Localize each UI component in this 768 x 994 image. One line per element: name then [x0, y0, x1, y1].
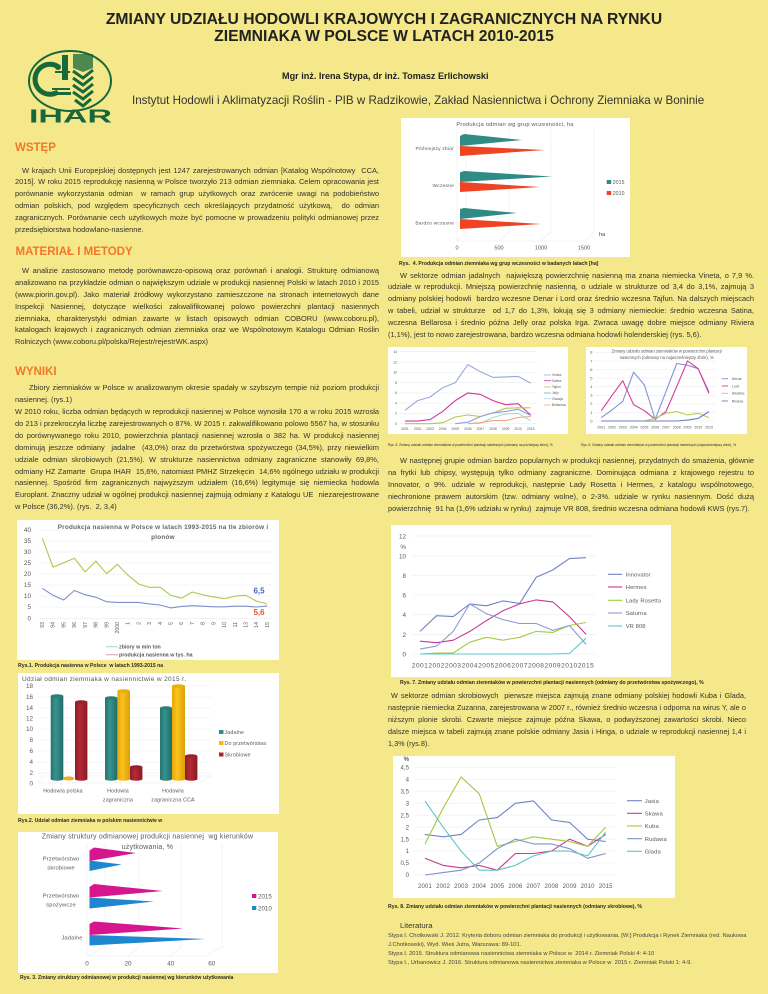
- legend: produkcja nasienna w tys. ha: [119, 653, 193, 659]
- heading: Materiał i metody: MATERIAŁ I METODY: [16, 246, 133, 258]
- authors: Mgr inż. Irena Stypa, dr inż. Tomasz Erlichowski: [282, 71, 489, 81]
- x axis labels: 2008: [489, 427, 497, 431]
- y axis labels: 14: [26, 705, 33, 712]
- text: odmiany skrobiowe: [388, 691, 746, 748]
- x axis labels: 5: [168, 622, 174, 625]
- text: Materiał i metody: [15, 266, 379, 346]
- x axis labels: 10: [222, 622, 228, 628]
- text: odmiany skrobiowe: dalsze miejsca w tabeli zajmują znane polskie odmiany Jasia i Hinga, o udziale w reprodukcji nasiennej 1,4 i: [388, 727, 746, 736]
- legend: Do przetwórstwa: [224, 741, 266, 747]
- category labels: Jadalne: [61, 936, 83, 942]
- bars: Hodowla zagraniczna: [105, 689, 142, 781]
- value label 5,6: 5,6: [253, 608, 265, 617]
- x axis labels: [40, 622, 271, 634]
- y axis labels: 0: [27, 616, 31, 622]
- y axis labels: 4: [590, 384, 593, 389]
- text: odmiany do przetwórstwa: niechronione prawem autorskim (tzw. odmiany wolne), o 2-3%. udziale w rynku nasiennym. Dość dużą: [388, 492, 754, 501]
- y axis labels: 8: [29, 737, 33, 744]
- legend: [722, 377, 745, 403]
- x axis labels: 1: [126, 622, 132, 625]
- caption: Rys. 7: Rys. 7. Zmiany udziału odmian ziemniaków w powierzchni plantacji nasiennych (odmiany do przetwórstwa spożywczego), %: [400, 680, 704, 686]
- legend: Hermes: [626, 585, 647, 591]
- x axis labels: 2006: [464, 427, 472, 431]
- x axis labels: Hodowla: [107, 788, 129, 794]
- text: odmiany skrobiowe: następnie niemiecka Zuzanna, zarejestrowana w 2007 r., również średnio wczesna i odporna na wirus Y, ale o: [388, 703, 746, 712]
- legend: Vineta: [552, 373, 561, 377]
- x axis labels: 2010: [694, 426, 702, 430]
- cones 2015: [460, 134, 552, 219]
- x axis labels: 2004: [472, 884, 487, 890]
- category labels: Późniejszy zbiór: [415, 146, 454, 152]
- y axis labels: 4,5: [401, 764, 410, 772]
- legend: Jelly: [552, 391, 559, 395]
- x axis labels: 2009: [502, 427, 509, 431]
- y axis labels: 20: [24, 571, 31, 578]
- x axis labels: 2009: [684, 426, 692, 430]
- series: produkcja nasienna: [42, 588, 267, 608]
- legend: [607, 180, 625, 197]
- legend: Owacja: [552, 397, 563, 401]
- x axis labels: 4: [158, 622, 164, 625]
- bars: Hodowla zagraniczna CCA: [160, 684, 197, 781]
- y axis labels: [26, 683, 33, 788]
- x axis labels: 94: [51, 622, 57, 628]
- text: Wyniki: [15, 383, 379, 511]
- x axis labels: 2004: [630, 426, 638, 430]
- chart: Rys. 3 cone bar chart: [18, 832, 278, 973]
- y axis labels: 4: [406, 776, 410, 784]
- chart: Rys. 6 line chart: [586, 347, 747, 434]
- icon: IHAR logo: IHAR: [29, 106, 112, 126]
- text: Wyniki: udziale odmian skrobiowych (21,5%). W strukturze nasiennictwa odmiany zagraniczne stanowiły 69,8%,: [15, 455, 379, 464]
- series: zbiory: [42, 538, 267, 604]
- x axis labels: 2003: [426, 427, 434, 431]
- x axis labels: 96: [72, 622, 78, 628]
- cones 2015: [90, 848, 183, 935]
- y axis labels: [393, 350, 397, 426]
- x axis labels: 2008: [528, 662, 544, 670]
- legend: Saturna: [626, 611, 647, 617]
- x axis labels: 11: [233, 622, 239, 627]
- y axis labels: 6: [402, 592, 406, 600]
- x axis labels: 13: [244, 622, 250, 628]
- y axis labels: 5: [590, 376, 593, 380]
- text: Materiał i metody: (www.piorin.gov.pl). Jako materiał źródłowy wykorzystano zamieszczone na stronach internetowych dane: [15, 290, 379, 299]
- y axis labels: 4: [402, 612, 406, 619]
- y axis labels: 40: [24, 527, 31, 534]
- category labels: skrobiowe: [47, 866, 75, 872]
- axis labels: 500: [494, 246, 504, 252]
- text: odmiany jadalne: w tabeli, udział w strukturze od 1,7 do 1,3%, lokują się 3 odmiany niemieckie: średnio wczesna Satina,: [388, 306, 754, 315]
- chart title: Zmiany udziału odmian ziemniaków w powierzchni plantacji: [612, 348, 722, 354]
- chart title: Udział odmian ziemniaka w nasiennictwie w 2015 r.: [22, 676, 186, 683]
- x axis labels: 6: [179, 622, 185, 625]
- legend: Innovator: [626, 572, 651, 578]
- caption: Rys. 1: Rys.1. Produkcja nasienna w Polsce w latach 1993-2015 na: [18, 663, 163, 669]
- legend: Lord: [732, 384, 739, 388]
- x axis labels: 14: [254, 622, 260, 628]
- heading: Literatura: Literatura: [400, 921, 432, 930]
- category labels: Przetwórstwo: [43, 894, 79, 900]
- y axis labels: 0,5: [401, 860, 410, 867]
- cones 2010: [90, 860, 206, 946]
- text: odmiany jadalne: odmiany polskiej hodowli bardzo wczesne Denar i Lord oraz średnio wczesna Tajfun. Na dalszych miejscach: [388, 294, 754, 303]
- x axis labels: 2006: [495, 662, 511, 670]
- category labels: Bardzo wczesne: [415, 220, 454, 226]
- axis labels: ha: [599, 232, 606, 238]
- chart title: Produkcja nasienna w Polsce w latach 1993-2015 na tle zbiorów i: [58, 524, 268, 531]
- series lines: [425, 777, 606, 875]
- y axis labels: 30: [24, 549, 31, 556]
- text: Wyniki: dominują jeszcze odmiany jadalne (43,0%) oraz do przetwórstwa spożywczego (34,5%), przy niewielkim: [15, 443, 379, 452]
- x axis labels: 2015: [705, 426, 713, 430]
- x axis labels: 20: [124, 960, 132, 968]
- legend: Kuba: [645, 824, 659, 830]
- text: Wyniki: odmiany HZ Zamarte Grupa IHAR 15,6%, natomiast PMHZ Strzekęcin 14,6% ogólnego udziału w produkcji: [15, 467, 379, 476]
- y axis labels: 1: [406, 848, 410, 855]
- x axis labels: [597, 426, 713, 430]
- y axis labels: 0: [29, 780, 33, 788]
- y axis labels: [590, 350, 593, 423]
- legend: Lady Rosetta: [626, 598, 662, 604]
- legend: Riviera: [732, 399, 744, 403]
- x axis labels: 2001: [401, 427, 409, 431]
- text: Wstęp: 2015]. W roku 2015 reprodukcję nasienną w Polsce tworzyło 213 odmian ziemniaka. Celem opracowania jest: [15, 177, 379, 186]
- y axis labels: 2: [29, 770, 33, 777]
- y axis labels: 4: [29, 759, 33, 766]
- x axis labels: 2000: [115, 622, 121, 634]
- y axis labels: 6: [395, 391, 397, 395]
- x axis labels: 9: [211, 622, 217, 625]
- legend: Satina: [552, 379, 562, 383]
- x axis labels: [43, 788, 195, 804]
- y axis labels: 5: [27, 604, 31, 611]
- text: Materiał i metody: analizowano na przykładzie odmian o największym udziale w produkcji nasiennej Polski w latach 2010 i 2015: [15, 278, 379, 287]
- y axis labels: [399, 534, 406, 658]
- y axis labels: 3,5: [401, 788, 410, 795]
- text: odmiany jadalne: udziałe w reprodukcji. Mniejszą powierzchnię nasienną, o udziale w strukturze od 3,4 do 3,1%, zajmują 3: [388, 282, 754, 291]
- axis labels: 1000: [535, 246, 547, 252]
- x axis labels: 98: [94, 622, 100, 628]
- legend: Jasia: [645, 799, 660, 805]
- text: Materiał i metody: katalogach krajowych i zagranicznych odmian ziemniaka oraz we Wspólnotowym Katalogu Odmian Roślin: [15, 325, 379, 334]
- heading: Wstęp: WSTĘP: [15, 142, 56, 154]
- x axis labels: [401, 427, 535, 431]
- text: Wstęp: przedsiębiorstwa hodowlano-nasienne.: [15, 225, 144, 234]
- chart title: użytkowania, %: [122, 844, 173, 851]
- y axis labels: 1: [590, 410, 593, 415]
- legend: Jadalne: [224, 730, 244, 736]
- heading: Wyniki: WYNIKI: [15, 366, 57, 378]
- legend: Skawa: [645, 811, 663, 817]
- chart: Rys. 2 cylinder bar chart: [18, 673, 279, 814]
- x axis labels: 2007: [526, 884, 541, 890]
- x axis labels: 2004: [439, 427, 447, 431]
- y axis labels: 3: [406, 800, 410, 807]
- text: Materiał i metody: ziemniaka, charakterystyki odmian zawarte w listach opisowych odmian COBORU (www.coboru.pl),: [15, 314, 379, 323]
- text: Wyniki: nasiennej. (rys.1): [15, 395, 72, 404]
- legend: [106, 645, 193, 659]
- y axis labels: 10: [393, 371, 397, 375]
- x axis labels: 2008: [673, 426, 681, 430]
- x axis labels: 2001: [412, 662, 428, 670]
- x axis labels: 8: [201, 622, 207, 625]
- x axis labels: 2010: [561, 662, 578, 670]
- legend: VR 808: [626, 624, 646, 630]
- series lines: [420, 558, 586, 654]
- y axis labels: 6: [590, 367, 593, 372]
- text: Wstęp: zagranicznych. Porównanie cech użytkowych może być pomocne w prowadzeniu polityki odmianowej przez: [15, 213, 379, 222]
- y axis labels: 16: [26, 694, 33, 701]
- x axis labels: Hodowla: [162, 788, 184, 794]
- x axis labels: 2003: [445, 662, 461, 670]
- x axis labels: 2015: [578, 662, 594, 670]
- x axis labels: 2004: [462, 662, 478, 670]
- x axis labels: 2009: [545, 662, 561, 670]
- axis labels: [455, 232, 606, 252]
- caption: Rys. 5: Rys. 5. Zmiany udziału odmian ziemniaków w powierzchni plantacji nasiennych (odmiany na późniejszy zbiór), %: [388, 443, 553, 447]
- legend: 2015: [258, 893, 272, 900]
- caption: Rys. 3: Rys. 3. Zmiany struktury odmianowej w produkcji nasiennej wg kierunków użytkowania: [20, 975, 233, 981]
- y axis labels: 0: [402, 652, 406, 658]
- y axis labels: 12: [393, 360, 397, 364]
- x axis labels: 2007: [662, 426, 670, 430]
- text: Wstęp: [15, 166, 379, 234]
- x axis labels: 2005: [640, 426, 648, 430]
- text: Materiał i metody: Inspekcji Nasiennej, dotyczące wielkości zakwalifikowanej polowo powierzchni plantacji nasiennych: [15, 302, 379, 311]
- value label 6,5: 6,5: [253, 586, 265, 596]
- category labels: Wczesne: [432, 183, 454, 189]
- institute: Instytut Hodowli i Aklimatyzacji Roślin - PIB w Radzikowie, Zakład Nasiennictwa i Ochrony Ziemniaka w Boninie: [132, 94, 704, 107]
- category labels: [415, 146, 454, 226]
- x axis labels: 2001: [597, 426, 605, 430]
- text: Wyniki: w Polsce (36,2%). (rys. 2, 3,4): [15, 502, 117, 511]
- references: J.Chotkowski), Wyd. Wieś Jutra, Warszawa: 89-101.: [388, 942, 521, 948]
- legend: zbiory w mln ton: [119, 645, 161, 651]
- x axis labels: 0: [85, 960, 89, 968]
- chart title: Produkcja odmian wg grup wczesności, ha: [456, 122, 574, 128]
- y axis labels: 7: [590, 358, 593, 363]
- caption: Rys. 6: Rys. 6. Zmiany udziału odmian ziemniaków w powierzchni plantacji nasiennych (najwcześniejszy zbiór), %: [581, 443, 736, 447]
- x axis labels: 2002: [428, 662, 445, 670]
- x axis labels: 2002: [436, 884, 451, 890]
- x axis labels: 3: [147, 622, 153, 625]
- x axis labels: 7: [190, 622, 196, 625]
- text: Materiał i metody: W analizie zastosowano metodę porównawczo-opisową oraz porównań i analogii. Strukturę odmianową: [22, 266, 379, 275]
- series lines: [601, 361, 709, 421]
- y axis labels: 8: [402, 573, 406, 580]
- x axis labels: 2002: [608, 426, 616, 430]
- text: odmiany skrobiowe: 1,3% (rys.8).: [388, 739, 429, 748]
- x axis labels: 2010: [581, 884, 595, 890]
- text: Wyniki: Europlant. Znaczny udział w ogólnej produkcji nasiennej zajmują odmiany z Katalogu UE niezarejestrowane: [15, 490, 379, 499]
- legend: [544, 373, 566, 407]
- x axis labels: 93: [40, 622, 46, 628]
- legend: [252, 893, 272, 912]
- x axis labels: 2007: [511, 662, 528, 670]
- text: Wyniki: nasiennej. Spośród firm zagranicznych najwyższym udziałem (16,6%) legitymuje się niemiecka hodowla: [15, 478, 379, 487]
- x axis labels: [85, 960, 216, 968]
- chart: Rys. 4 cone bar chart: [401, 118, 630, 257]
- y axis labels: 35: [24, 538, 31, 545]
- y axis labels: [24, 527, 31, 622]
- icon: IHAR logo: [28, 50, 112, 126]
- y axis labels: 2: [402, 632, 406, 639]
- y axis labels: 25: [24, 560, 31, 567]
- x axis labels: 99: [104, 622, 110, 628]
- references: Stypa I., Urbanowicz J. 2016. Struktura odmianowa nasiennictwa ziemniaka w Polsce w 2015 r. Ziemniak Polski 1: 4-9.: [388, 960, 692, 966]
- y axis labels: 10: [399, 554, 406, 560]
- legend: Denar: [732, 377, 743, 381]
- x axis labels: 2010: [514, 427, 522, 431]
- chart title: Zmiany struktury odmianowej produkcji nasiennej wg kierunków: [42, 834, 253, 840]
- y axis labels: 15: [24, 582, 31, 589]
- title: ZIEMNIAKA W POLSCE W LATACH 2010-2015: [214, 28, 554, 44]
- y axis labels: %: [400, 544, 406, 551]
- x axis labels: 2002: [414, 427, 421, 431]
- text: Wstęp: W krajach Unii Europejskiej dostępnych jest 1247 zarejestrowanych odmian [Katalog Wspólnotowy CCA,: [22, 166, 379, 174]
- x axis labels: Hodowla polska: [43, 788, 83, 794]
- y axis labels: 2: [406, 824, 410, 831]
- y axis labels: [401, 756, 410, 879]
- chart title: nasiennych (odmiany na najwcześniejszy zbiór), %: [620, 355, 714, 360]
- y axis labels: 12: [26, 716, 33, 722]
- text: odmiany jadalne: (1,1%), jest to nowo zarejestrowana, bardzo wczesna odmiana hodowli holenderskiej (rys. 5,6).: [388, 330, 701, 339]
- x axis labels: 60: [208, 960, 216, 968]
- text: odmiany do przetwórstwa: powierzchnię 91 ha (1,6% udziału w rynku) zajmuje VR 808, średnio wczesna odmiana hodowli KWS (rys.7).: [388, 504, 750, 513]
- y axis labels: 2: [590, 401, 593, 406]
- legend: Bellarosa: [552, 403, 566, 407]
- text: odmiany do przetwórstwa: na frytki lub chipsy, występują tylko odmiany zagraniczne. Dominująca odmiana z krajowego rejestru to: [388, 468, 754, 477]
- x axis labels: 2003: [454, 884, 469, 890]
- x axis labels: 2003: [619, 426, 627, 430]
- x axis labels: 2: [136, 622, 142, 625]
- y axis labels: 8: [395, 381, 397, 385]
- y axis labels: %: [404, 756, 410, 763]
- y axis labels: 10: [24, 593, 31, 600]
- title: ZMIANY UDZIAŁU HODOWLI KRAJOWYCH I ZAGRANICZNYCH NA RYNKU: [106, 11, 662, 28]
- x axis labels: 40: [167, 960, 175, 968]
- text: Wstęp: porównanie wykorzystania odmian w ramach grup użytkowych oraz zwrócenie uwagi na podobieństwo: [15, 189, 379, 198]
- x axis labels: 2006: [651, 426, 659, 430]
- x axis labels: 97: [83, 622, 89, 628]
- x axis labels: [418, 884, 613, 890]
- text: Wyniki: W 2010 roku, liczba odmian będących w reprodukcji nasiennej w Polsce wynosiła 170 a w roku 2015 wzrosła: [15, 407, 379, 416]
- chart title: plonów: [151, 534, 175, 541]
- legend: [627, 799, 667, 855]
- x axis labels: 2005: [478, 662, 495, 670]
- text: odmiany jadalne: wczesna Bellarosa i średnio późna Jelly oraz polska Irga. Zwraca uwagę dobre miejsce odmiany Riviera: [388, 318, 754, 327]
- legend: Skrobiowe: [224, 752, 251, 758]
- legend: 2015: [613, 180, 625, 186]
- category labels: [43, 856, 83, 942]
- y axis labels: 6: [29, 748, 33, 755]
- text: Wyniki: Zbiory ziemniaków w Polsce w analizowanym okresie spadały w szybszym tempie niż poziom produkcji: [29, 383, 379, 392]
- y axis labels: 0: [406, 872, 410, 879]
- y axis labels: 0: [590, 418, 593, 423]
- x axis labels: zagraniczna CCA: [151, 798, 195, 804]
- x axis labels: 2015: [599, 884, 613, 890]
- text: odmiany do przetwórstwa: Innovator, o 9%. udziale w reprodukcji, następnie Lady Rosetta i Hermes, z katalogu wspólnotowego,: [388, 480, 754, 489]
- references: Stypa I. 2015. Struktura odmianowa nasiennictwa ziemniaka w Polsce w 2014 r. Ziemniak Polski 4: 4-10: [388, 951, 654, 957]
- y axis labels: 0: [395, 422, 397, 426]
- x axis labels: 95: [61, 622, 67, 628]
- y axis labels: 10: [26, 726, 33, 733]
- bars: Hodowla polska: [51, 694, 87, 781]
- text: Wyniki: do porównywanego roku 2010, powierzchnia plantacji nasiennej wzrosła o 382 ha. W produkcji nasiennej: [15, 431, 379, 440]
- x axis labels: 2015: [527, 427, 535, 431]
- legend: 2010: [613, 191, 625, 197]
- text: Wstęp: odmian polskich, pod względem specyficznych cech określających przydatność użytkową, do odmian: [15, 201, 379, 210]
- axis labels: 0: [455, 246, 459, 252]
- y axis labels: 18: [26, 683, 33, 690]
- chart: Rys. 5 line chart: [388, 347, 568, 434]
- text: odmiany skrobiowe: W sektorze odmian skrobiowych pierwsze miejsca zajmują znane odmiany polskiej hodowli Kuba i Glada,: [391, 691, 746, 700]
- category labels: spożywcze: [46, 902, 76, 908]
- text: odmiany do przetwórstwa: W następnej grupie odmian bardzo popularnych w produkcji nasiennej, przydatnych do smażenia, głównie: [400, 456, 754, 465]
- legend: Tajfun: [552, 385, 561, 389]
- x axis labels: 2009: [563, 884, 577, 890]
- text: Wyniki: do 213 i przekroczyła liczbę zarejestrowanych o 87%. W 2015 r. zakwalifikowano polowo 5567 ha, w stosunku: [15, 419, 379, 428]
- title: [106, 11, 662, 44]
- text: odmiany jadalne: W sektorze odmian jadalnych największą powierzchnię nasienną ma znana niemiecka Vineta, o 7,9 %.: [400, 270, 754, 280]
- axis labels: 1500: [578, 246, 590, 252]
- y axis labels: 12: [399, 534, 406, 540]
- y axis labels: 4: [395, 401, 397, 405]
- chart: Rys. 8 line chart: [393, 756, 675, 898]
- caption: Rys. 2: Rys.2. Udział odmian ziemniaka w polskim nasiennictwie w: [18, 818, 162, 824]
- caption: Rys. 8: Rys. 8. Zmiany udziału odmian ziemniaków w powierzchni plantacji nasiennych (odmiany skrobiowe), %: [388, 904, 642, 910]
- legend: 2010: [258, 905, 272, 912]
- chart: Rys. 1 seed production line chart: [17, 520, 279, 660]
- x axis labels: 15: [265, 622, 271, 628]
- y axis labels: 8: [590, 350, 593, 355]
- x axis labels: 2005: [452, 427, 459, 431]
- x axis labels: 2007: [477, 427, 484, 431]
- caption: Rys. 4: Rys. 4. Produkcja odmian ziemniaka wg grup wczesności w badanych latach [ha]: [399, 261, 598, 267]
- series lines: [405, 365, 531, 424]
- x axis labels: 2005: [490, 884, 505, 890]
- y axis labels: 14: [393, 350, 397, 354]
- x axis labels: zagraniczna: [103, 798, 133, 804]
- text: odmiany skrobiowe: niższym plonie skrobi. Czwarte miejsce zajmuje późna Skawa, o podwyższonej zawartości skrobi. Nieco: [388, 715, 746, 724]
- x axis labels: 2006: [508, 884, 523, 890]
- legend: Glada: [645, 849, 662, 855]
- legend: [608, 572, 662, 630]
- x axis labels: [412, 662, 594, 670]
- chart: Rys. 7 line chart: [391, 525, 671, 677]
- x axis labels: 2001: [418, 884, 432, 890]
- cones 2010: [460, 146, 545, 229]
- text: odmiany do przetwórstwa: [388, 456, 754, 513]
- legend: [219, 730, 266, 758]
- y axis labels: 2,5: [401, 812, 410, 819]
- references: Stypa I. Chotkowski J. 2012. Kryteria doboru odmian ziemniaka do produkcji i użytkowania. [W:] Produkcja i Rynek Ziemniaka (red. Naukowa: [388, 933, 746, 939]
- x axis labels: 2008: [545, 884, 559, 890]
- text: odmiany jadalne: [388, 270, 754, 339]
- y axis labels: 2: [395, 412, 397, 416]
- legend: Rudawa: [645, 837, 667, 843]
- references: [388, 933, 746, 966]
- category labels: Przetwórstwo: [43, 856, 79, 862]
- y axis labels: 1,5: [401, 836, 410, 843]
- y axis labels: 3: [590, 393, 593, 398]
- legend: Ariadna: [732, 392, 745, 396]
- text: Materiał i metody: Rolniczych (www.coboru.pl/polska/Rejestr/rejestrWK.aspx): [15, 337, 208, 346]
